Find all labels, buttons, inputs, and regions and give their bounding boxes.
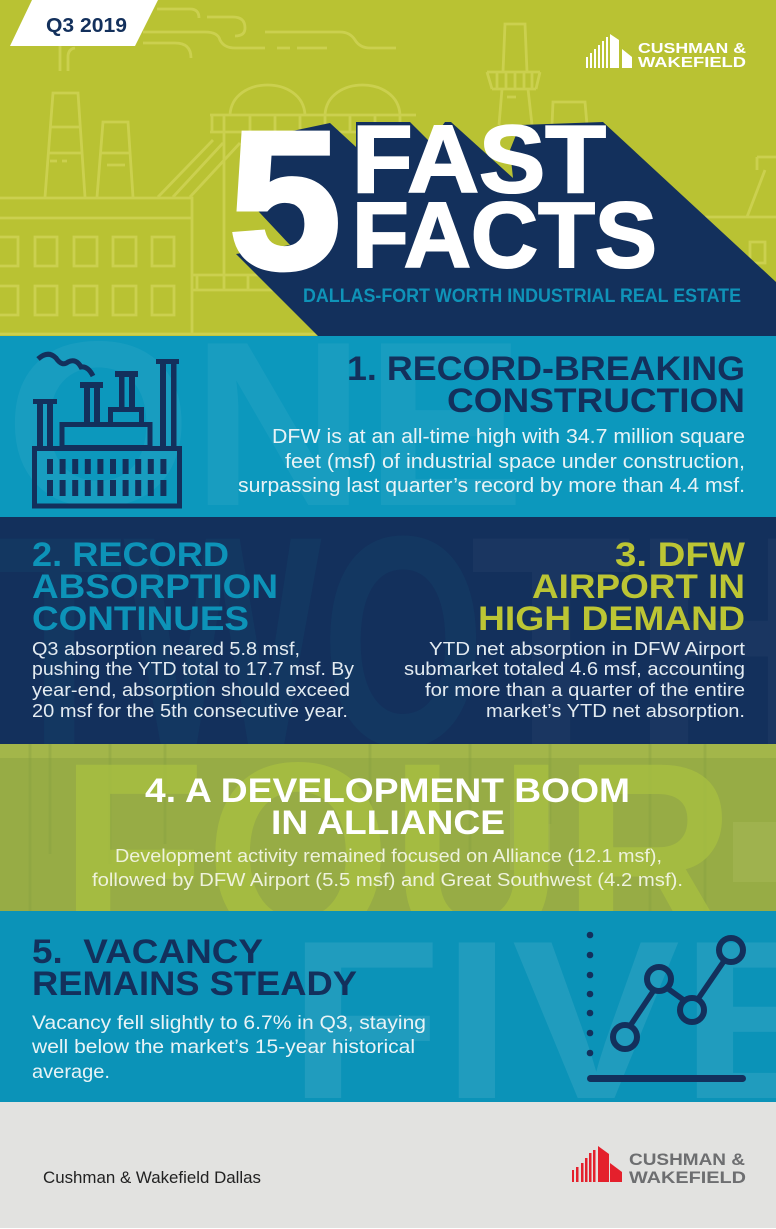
text: fact 1 body <box>238 426 745 497</box>
text: fact 2 body: pushing the YTD total to 17.7 msf. By <box>32 658 355 679</box>
text: fact 2 body: year-end, absorption should exceed <box>32 679 350 700</box>
heading: fact 1 <box>347 350 745 420</box>
panel: facts 2 and 3: TWO <box>0 473 485 809</box>
subtitle: DALLAS-FORT WORTH INDUSTRIAL REAL ESTATE <box>303 285 741 307</box>
logo: Cushman & Wakefield red <box>572 1146 746 1187</box>
heading: fact 3: HIGH DEMAND <box>478 600 745 638</box>
background line art: industrial skyline <box>0 9 776 335</box>
heading: fact 2: 2. RECORD <box>32 536 229 574</box>
heading: fact 5: 5. VACANCY <box>32 933 263 971</box>
panel: fact 5: FIVE <box>288 893 776 1146</box>
text: fact 3 body: YTD net absorption in DFW Airport <box>429 638 745 659</box>
text: office name: Cushman & Wakefield Dallas <box>43 1169 261 1187</box>
heading: fact 2: CONTINUES <box>32 600 249 638</box>
icon: factory <box>33 354 180 506</box>
heading: fact 5 <box>32 933 357 1003</box>
logo: Cushman & Wakefield white: CUSHMAN & <box>638 41 747 57</box>
panel: fact 1: ONE <box>5 292 525 555</box>
text: fact 3 body: for more than a quarter of the entire <box>425 679 745 700</box>
heading: fact 4: IN ALLIANCE <box>271 804 505 842</box>
text: fact 4 body: Development activity remained focused on Alliance (12.1 msf), <box>115 845 662 866</box>
logo: Cushman & Wakefield white: WAKEFIELD <box>638 55 746 71</box>
text: fact 2 body <box>32 638 355 721</box>
text: fact 1 body: surpassing last quarter’s record by more than 4.4 msf. <box>238 475 745 497</box>
heading: fact 3 <box>478 536 745 638</box>
heading: fact 5: REMAINS STEADY <box>32 965 357 1003</box>
text: fact 5 body: Vacancy fell slightly to 6.7% in Q3, staying <box>32 1012 426 1034</box>
text: fact 1 body: DFW is at an all-time high with 34.7 million square <box>272 426 745 448</box>
panel: footer <box>0 1102 776 1228</box>
panel: fact 1 <box>0 292 776 555</box>
title: 5 Fast Facts: FACTS <box>352 183 657 287</box>
text: fact 3 body <box>404 638 745 721</box>
text: fact 1 body: feet (msf) of industrial space under construction, <box>285 451 745 473</box>
heading: fact 4: 4. A DEVELOPMENT BOOM <box>145 772 630 810</box>
panel: header <box>0 0 776 336</box>
title: 5 Fast Facts <box>229 91 657 310</box>
text: fact 3 body: submarket totaled 4.6 msf, accounting <box>404 658 745 679</box>
text: fact 4 body <box>92 845 683 890</box>
text: fact 2 body: Q3 absorption neared 5.8 msf, <box>32 638 300 659</box>
tag: quarter: Q3 2019 <box>46 15 127 37</box>
panel: fact 5 <box>0 893 776 1146</box>
text: fact 2 body: 20 msf for the 5th consecutive year. <box>32 700 348 721</box>
tag: quarter <box>10 0 158 46</box>
text: fact 5 body: average. <box>32 1061 110 1083</box>
text: fact 5 body: well below the market’s 15-year historical <box>31 1036 415 1058</box>
photo: warehouse interior tint <box>0 744 776 911</box>
text: fact 3 body: market’s YTD net absorption. <box>486 700 745 721</box>
logo: Cushman & Wakefield red: CUSHMAN & <box>629 1150 745 1169</box>
logo: Cushman & Wakefield red: WAKEFIELD <box>629 1168 746 1187</box>
icon: line chart <box>587 932 746 1082</box>
heading: fact 3: AIRPORT IN <box>532 568 745 606</box>
heading: fact 4 <box>145 772 630 842</box>
title: 5 Fast Facts: 5 <box>229 91 341 310</box>
heading: fact 2: ABSORPTION <box>32 568 278 606</box>
long shadow behind title <box>236 122 776 336</box>
title: 5 Fast Facts: FAST <box>352 106 606 213</box>
heading: fact 1: CONSTRUCTION <box>447 382 745 420</box>
heading: fact 1: 1. RECORD-BREAKING <box>347 350 745 388</box>
text: fact 4 body: followed by DFW Airport (5.5 msf) and Great Southwest (4.2 msf). <box>92 869 683 890</box>
heading: fact 2 <box>32 536 278 638</box>
text: fact 5 body <box>31 1012 426 1083</box>
heading: fact 3: 3. DFW <box>615 536 745 574</box>
logo: Cushman & Wakefield white <box>586 34 747 71</box>
